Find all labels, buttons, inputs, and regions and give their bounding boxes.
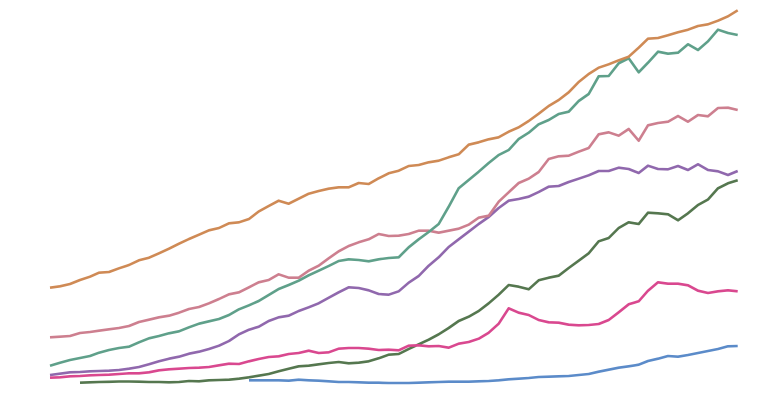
line: rose series (50, 108, 738, 337)
line: dark green series (80, 180, 738, 383)
line: purple series (50, 164, 738, 375)
line: teal series (50, 30, 738, 366)
line: orange series (50, 10, 738, 288)
line: blue series (249, 346, 738, 383)
line: magenta series (50, 282, 738, 378)
